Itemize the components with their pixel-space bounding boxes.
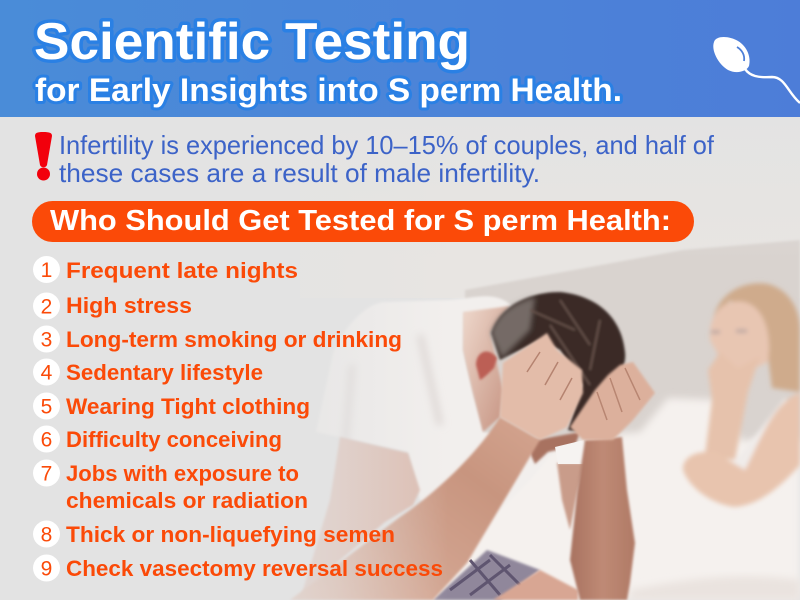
item 2: High stress xyxy=(66,293,192,318)
item 3: 3 xyxy=(41,328,52,352)
item 7: 7 xyxy=(41,462,52,486)
man's shirt xyxy=(316,296,560,540)
right hand xyxy=(570,362,655,440)
item 8: Thick or non-liquefying semen xyxy=(66,522,395,547)
intro text xyxy=(59,130,715,188)
subtitle: for Early Insights into S perm Health. xyxy=(35,72,622,108)
icon: exclamation mark xyxy=(35,132,52,180)
shirt sleeve xyxy=(555,440,584,464)
neck and ear area xyxy=(463,306,510,432)
item 2 xyxy=(33,292,192,320)
right forearm xyxy=(570,437,635,600)
item 7: chemicals or radiation xyxy=(66,488,308,513)
item 8: 8 xyxy=(41,524,52,546)
item 2: 2 xyxy=(41,296,52,318)
item 7: Jobs with exposure to xyxy=(66,461,299,486)
ear xyxy=(476,352,497,380)
icon: sperm xyxy=(713,37,800,103)
woman, out of focus xyxy=(683,283,800,507)
item 4: 4 xyxy=(41,362,53,384)
item 6: 6 xyxy=(41,428,52,452)
item 1: Frequent late nights xyxy=(66,258,298,283)
item 4: Sedentary lifestyle xyxy=(66,360,263,385)
man's far arm xyxy=(300,437,420,600)
intro text: these cases are a result of male infertility. xyxy=(59,158,540,188)
hair xyxy=(491,292,625,431)
item 3: Long-term smoking or drinking xyxy=(66,327,402,352)
header banner xyxy=(0,0,800,117)
checklist xyxy=(33,256,443,582)
item 6: Difficulty conceiving xyxy=(66,427,282,452)
item 7 xyxy=(33,460,308,513)
foreground arm xyxy=(290,417,540,600)
intro text: Infertility is experienced by 10–15% of couples, and half of xyxy=(59,130,715,160)
section heading pill: Who Should Get Tested for S perm Health: xyxy=(50,205,671,237)
item 9: Check vasectomy reversal success xyxy=(66,556,443,581)
item 5: 5 xyxy=(41,396,52,418)
shorts xyxy=(433,550,540,600)
thigh xyxy=(493,570,578,600)
section heading pill xyxy=(32,201,694,242)
item 9: 9 xyxy=(41,558,52,580)
item 1: 1 xyxy=(41,259,52,282)
man's arm behind, below sleeve xyxy=(557,463,584,530)
item 5: Wearing Tight clothing xyxy=(66,394,310,419)
left hand xyxy=(500,333,583,440)
title: Scientific Testing xyxy=(34,13,470,71)
